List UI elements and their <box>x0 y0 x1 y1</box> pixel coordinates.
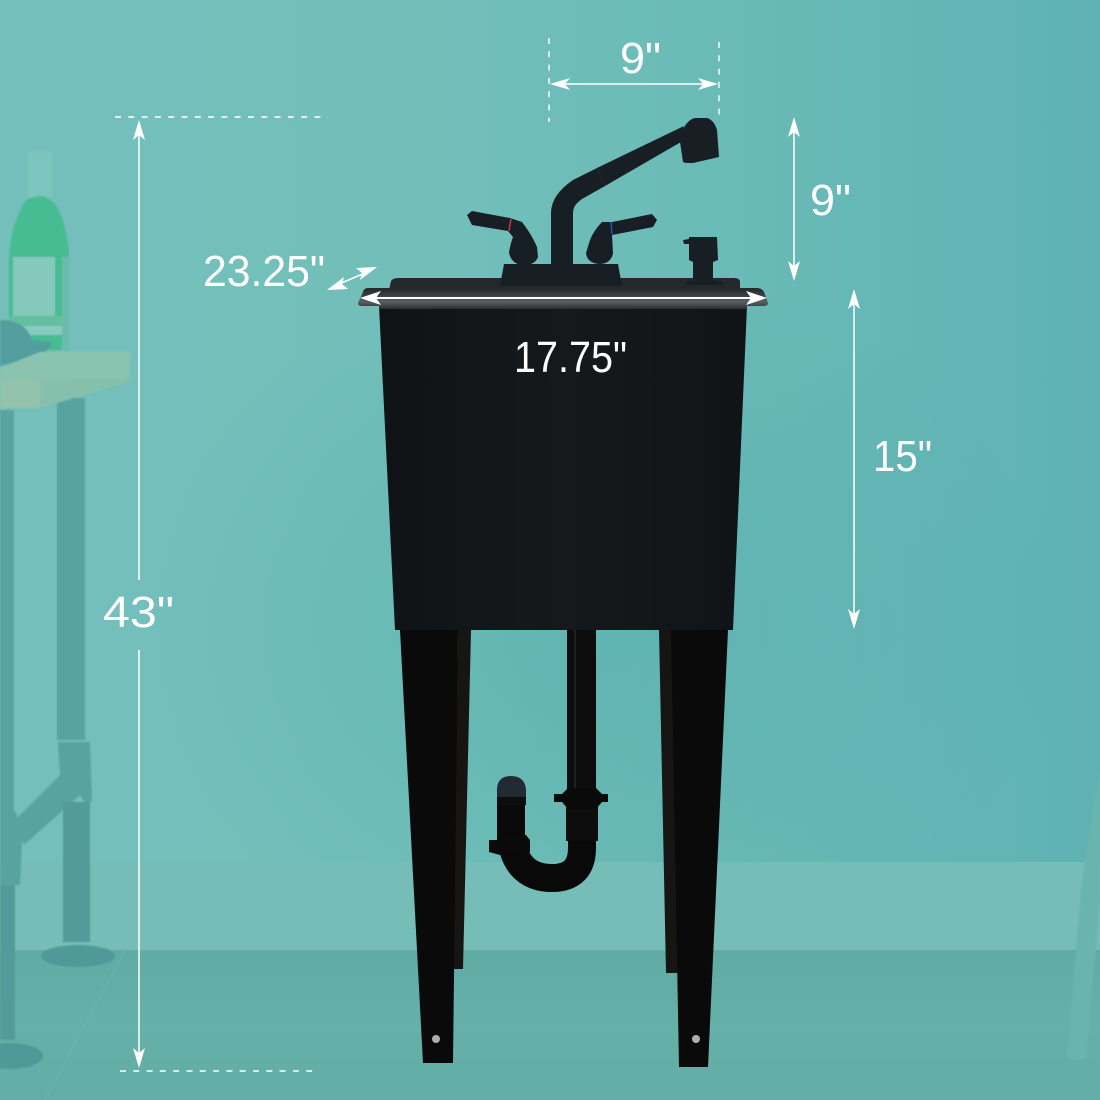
dimension: overall height 43 in: 43" <box>103 588 174 637</box>
cold indicator <box>611 222 612 234</box>
sink leg: left <box>400 630 471 1063</box>
dimension: width 17.75 in <box>360 291 767 382</box>
scene: folded towel <box>0 320 52 366</box>
drain pipe and P-trap <box>489 630 608 878</box>
background: baseboard <box>0 862 1100 950</box>
dimension: basin depth 15 in: 15" <box>873 432 932 481</box>
dimension: faucet height 9 in <box>788 117 851 281</box>
faucet spout <box>551 168 605 265</box>
dimension: basin depth 15 in <box>848 289 932 629</box>
dimension: faucet reach 9 in: 9" <box>620 34 661 83</box>
dimension: width 17.75 in: 17.75" <box>514 333 627 382</box>
faucet <box>467 118 722 286</box>
soap pump <box>683 237 722 285</box>
sink leg: right <box>659 630 728 1067</box>
dimension: faucet height 9 in: 9" <box>810 176 851 225</box>
sink rim <box>358 278 768 309</box>
scene: chair leg at right edge <box>1067 770 1100 1060</box>
sink basin body <box>379 306 747 630</box>
left handle <box>467 211 538 265</box>
dimension: depth 23.25 in: 23.25" <box>203 247 325 296</box>
product: sink with faucet and drain <box>358 118 768 1067</box>
dimension: overall height 43 in <box>103 117 328 1071</box>
faucet deck plate <box>500 264 622 286</box>
background: wall <box>0 0 1100 870</box>
spray head <box>680 118 719 163</box>
scene: metal pipe table frame <box>0 398 115 1069</box>
right handle <box>586 214 657 264</box>
scene: green soap bottle <box>9 152 69 350</box>
hot indicator <box>509 219 511 231</box>
dimension: faucet reach 9 in <box>549 34 719 122</box>
scene: wooden table top <box>0 352 131 408</box>
background: floor <box>0 950 1100 1100</box>
pull-out wand <box>597 126 684 186</box>
